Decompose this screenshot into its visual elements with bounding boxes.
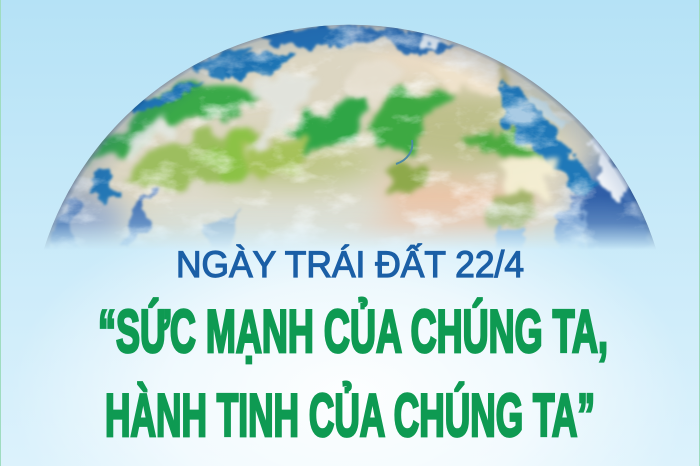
globe base land xyxy=(50,24,638,245)
land and vegetation xyxy=(85,60,540,230)
clouds xyxy=(130,60,555,200)
heading: date: NGÀY TRÁI ĐẤT 22/4 xyxy=(176,244,524,285)
lake xyxy=(396,140,412,164)
white cloud swirls xyxy=(418,35,625,205)
globe limb shading xyxy=(45,24,654,246)
oceans xyxy=(45,22,655,250)
mottled cloud cover xyxy=(54,24,646,247)
globe xyxy=(44,24,655,248)
